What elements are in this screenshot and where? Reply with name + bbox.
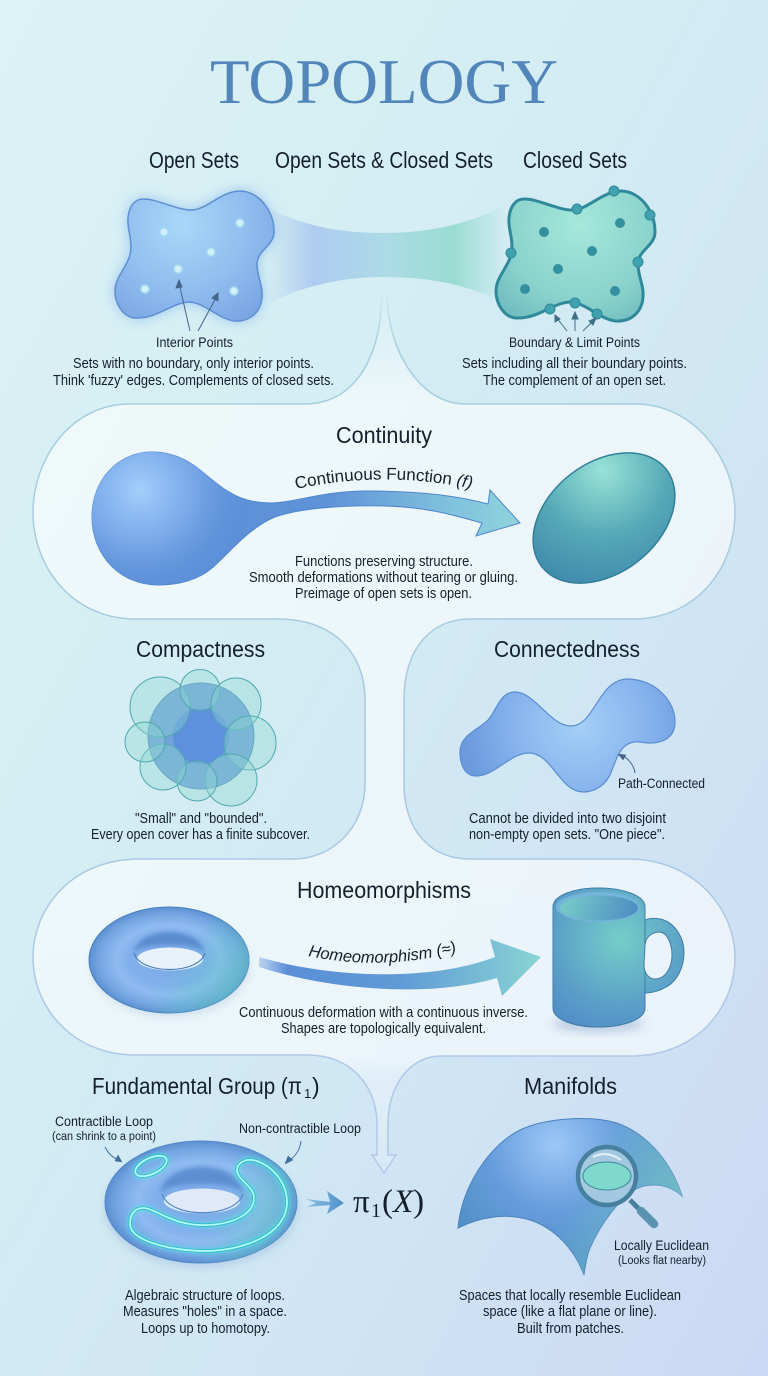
label: locally euclidean: Locally Euclidean — [614, 1238, 709, 1253]
panel: manifolds — [458, 1073, 709, 1337]
label: interior points: Interior Points — [156, 335, 233, 350]
icon: blob with continuous arrow — [92, 452, 520, 585]
icon: coffee mug — [552, 888, 684, 1032]
panel: continuity — [92, 422, 676, 602]
icon: open set blob — [115, 191, 274, 321]
text: homeomorphisms description — [239, 1005, 528, 1037]
icon: closed set blob — [496, 186, 655, 321]
icon: magnifying glass — [578, 1147, 654, 1224]
arrow: path-connected — [618, 754, 635, 773]
text: fundamental group description: Measures "holes" in a space. — [123, 1304, 287, 1320]
text: fundamental group description: Loops up to homotopy. — [141, 1321, 270, 1337]
text: manifolds description: Spaces that locally resemble Euclidean — [459, 1288, 681, 1304]
text: closed sets description: Sets including all their boundary points. — [462, 356, 687, 372]
text: closed sets description — [462, 356, 687, 389]
text: compactness description — [91, 811, 310, 843]
text: continuity description: Functions preserving structure. — [295, 554, 473, 570]
heading: open sets: Open Sets — [149, 147, 239, 173]
text: compactness description: "Small" and "bounded". — [135, 811, 267, 827]
heading: homeomorphisms: Homeomorphisms — [297, 877, 471, 903]
text: open sets description — [53, 356, 334, 389]
text: manifolds description: space (like a flat plane or line). — [483, 1304, 657, 1320]
panel: homeomorphisms — [88, 877, 684, 1037]
text: homeomorphisms description: Shapes are topologically equivalent. — [281, 1021, 486, 1037]
arrow: to non-contractible loop — [285, 1141, 301, 1164]
text: manifolds description: Built from patches. — [517, 1321, 624, 1337]
text: fundamental group description — [123, 1288, 287, 1337]
arrow label: continuous function: Continuous Function (f) — [296, 468, 472, 491]
text: connectedness description — [469, 811, 666, 843]
arrows: interior points — [176, 280, 218, 331]
heading: connectedness: Connectedness — [494, 636, 640, 662]
text: continuity description: Smooth deformations without tearing or gluing. — [249, 570, 518, 586]
panel: compactness — [91, 636, 310, 843]
label: boundary and limit points: Boundary & Limit Points — [509, 335, 640, 350]
text: open sets description: Sets with no boundary, only interior points. — [73, 356, 314, 372]
formula: pi one of X — [353, 1184, 424, 1222]
label: non-contractible loop: Non-contractible Loop — [239, 1121, 361, 1136]
arrow: homeomorphism — [259, 939, 541, 996]
label: path-connected: Path-Connected — [618, 776, 705, 791]
title: TOPOLOGY — [210, 47, 558, 117]
heading: fundamental group: Fundamental Group (π — [92, 1073, 302, 1099]
text: open sets description: Think 'fuzzy' edges. Complements of closed sets. — [53, 373, 334, 389]
heading: fundamental group: 1 — [304, 1086, 311, 1101]
icon: connected blob — [460, 679, 675, 792]
text: fundamental group description: Algebraic structure of loops. — [125, 1288, 285, 1304]
text: continuity description — [249, 554, 518, 602]
panel: central flowing container — [33, 293, 735, 1173]
label: locally euclidean — [614, 1238, 709, 1267]
text: connectedness description: non-empty open sets. "One piece". — [469, 827, 665, 843]
icon: teal ellipse — [508, 426, 700, 610]
panel: open and closed sets — [53, 147, 687, 389]
icon: curved manifold surface — [458, 1119, 682, 1275]
heading: closed sets: Closed Sets — [523, 147, 627, 173]
label: contractible loop: (can shrink to a point) — [52, 1131, 156, 1143]
heading: open sets and closed sets: Open Sets & Closed Sets — [275, 147, 493, 173]
text: connectedness description: Cannot be divided into two disjoint — [469, 811, 666, 827]
label: contractible loop: Contractible Loop — [55, 1114, 153, 1129]
heading: continuity: Continuity — [336, 422, 432, 448]
heading: compactness: Compactness — [136, 636, 265, 662]
arrows: boundary points — [555, 312, 596, 331]
panel: fundamental group — [52, 1073, 424, 1337]
label: locally euclidean: (Looks flat nearby) — [618, 1255, 706, 1267]
arrow label: homeomorphism: Homeomorphism (≈) — [308, 941, 455, 966]
text: closed sets description: The complement of an open set. — [483, 373, 666, 389]
connecting band between sets — [268, 204, 506, 304]
text: manifolds description — [459, 1288, 681, 1337]
heading: fundamental group: ) — [312, 1073, 320, 1099]
icon: open cover of a disc — [125, 670, 276, 806]
text: homeomorphisms description: Continuous deformation with a continuous inverse. — [239, 1005, 528, 1021]
formula: pi one of X: (X) — [382, 1184, 424, 1220]
text: compactness description: Every open cover has a finite subcover. — [91, 827, 310, 843]
arrow: torus to fundamental group — [306, 1191, 344, 1214]
panel: connectedness — [460, 636, 705, 843]
label: contractible loop — [52, 1114, 156, 1143]
formula: pi one of X: π — [353, 1184, 370, 1220]
icon: torus with loops — [105, 1141, 297, 1266]
heading: manifolds: Manifolds — [524, 1073, 617, 1099]
icon: torus — [89, 907, 249, 1016]
text: continuity description: Preimage of open sets is open. — [295, 586, 472, 602]
arrow: to contractible loop — [105, 1147, 122, 1162]
formula: pi one of X: 1 — [371, 1200, 381, 1222]
